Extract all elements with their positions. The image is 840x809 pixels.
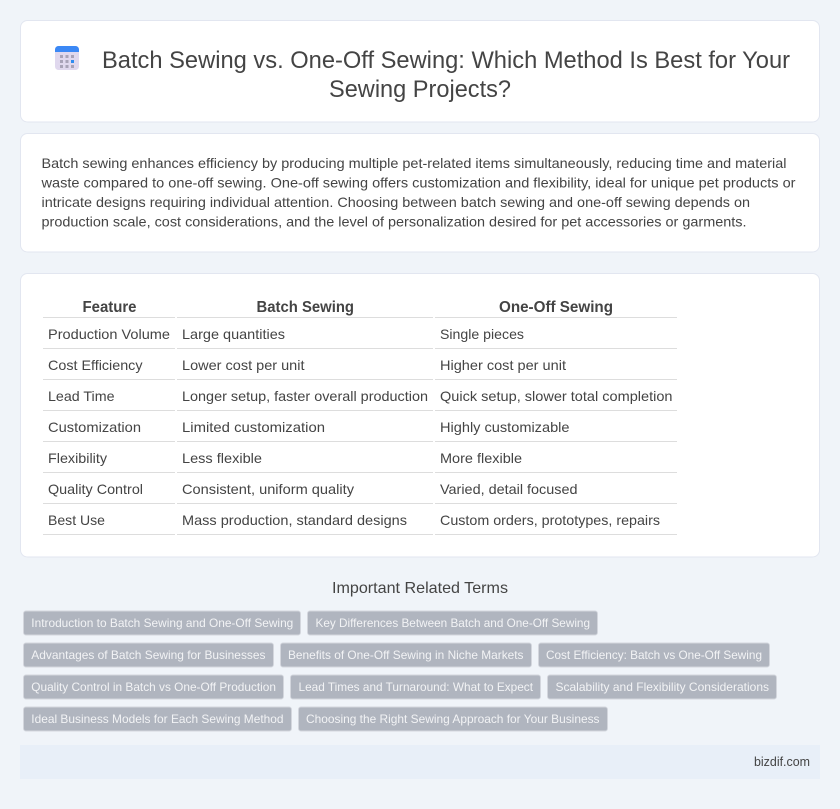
text block: description: waste compared to one-off sewing. One-off sewing offers customization and flexibility, ideal for unique pet products or bbox=[40, 175, 796, 191]
row: customization: Highly customizable bbox=[440, 419, 570, 435]
text block: description bbox=[40, 155, 796, 230]
table header row: One-Off Sewing bbox=[499, 299, 613, 316]
tag bbox=[24, 643, 274, 667]
tag bbox=[280, 643, 532, 667]
related terms tags bbox=[24, 611, 776, 731]
row: customization: Customization bbox=[48, 419, 141, 435]
row: best use: Custom orders, prototypes, repairs bbox=[440, 512, 660, 528]
tag: Scalability and Flexibility Considerations bbox=[556, 680, 769, 694]
tag: Benefits of One-Off Sewing in Niche Markets bbox=[288, 648, 524, 662]
tag: Introduction to Batch Sewing and One-Off Sewing bbox=[31, 616, 293, 630]
tag: Lead Times and Turnaround: What to Expect bbox=[298, 680, 534, 694]
panel: header bbox=[20, 20, 820, 122]
row: lead time: Quick setup, slower total completion bbox=[440, 388, 672, 404]
table rules bbox=[43, 317, 677, 535]
row: quality control: Quality Control bbox=[48, 481, 143, 497]
tag bbox=[24, 675, 284, 699]
row: quality control: Consistent, uniform quality bbox=[182, 481, 354, 497]
row: flexibility: Less flexible bbox=[182, 450, 262, 466]
panel: comparison table bbox=[20, 274, 820, 557]
tag bbox=[24, 611, 300, 635]
panel: description bbox=[20, 134, 820, 252]
footer site name: bizdif.com bbox=[754, 755, 810, 769]
row: quality control: Varied, detail focused bbox=[440, 481, 578, 497]
row: cost efficiency bbox=[48, 357, 566, 373]
row: cost efficiency: Higher cost per unit bbox=[440, 357, 566, 373]
row: production volume: Single pieces bbox=[440, 326, 524, 342]
text block: description: production scale, cost considerations, and the level of personalization desired for pet accessories or garments. bbox=[42, 214, 746, 230]
row: production volume: Large quantities bbox=[182, 326, 285, 342]
tag: Cost Efficiency: Batch vs One-Off Sewing bbox=[546, 648, 762, 662]
text block: description: Batch sewing enhances efficiency by producing multiple pet-related items simultaneously, reducing time and material bbox=[42, 155, 786, 171]
row: lead time: Lead Time bbox=[48, 388, 115, 404]
tag bbox=[298, 707, 608, 731]
table header row: Batch Sewing bbox=[256, 299, 354, 316]
row: best use: Best Use bbox=[48, 512, 105, 528]
row: flexibility: Flexibility bbox=[48, 450, 107, 466]
row: flexibility bbox=[48, 450, 522, 466]
row: customization: Limited customization bbox=[182, 419, 325, 435]
title: Batch Sewing vs. One-Off Sewing: Which Method Is Best for Your bbox=[102, 47, 790, 74]
tag bbox=[538, 643, 770, 667]
row: production volume: Production Volume bbox=[48, 326, 170, 342]
title: Sewing Projects? bbox=[329, 76, 511, 103]
text block: description: intricate designs requiring individual attention. Choosing between batch sewing and one-off sewing depends on bbox=[42, 194, 750, 210]
tag: Advantages of Batch Sewing for Businesses bbox=[31, 648, 265, 662]
icon: calendar bbox=[55, 46, 79, 70]
tag bbox=[308, 611, 598, 635]
table header row: Feature bbox=[82, 299, 137, 316]
table header row bbox=[82, 299, 613, 316]
row: lead time bbox=[48, 388, 672, 404]
tag bbox=[548, 675, 776, 699]
tag bbox=[290, 675, 540, 699]
row: best use bbox=[48, 512, 660, 528]
row: best use: Mass production, standard designs bbox=[182, 512, 407, 528]
row: cost efficiency: Cost Efficiency bbox=[48, 357, 142, 373]
footer bbox=[20, 745, 820, 779]
tag: Ideal Business Models for Each Sewing Method bbox=[31, 712, 283, 726]
row: customization bbox=[48, 419, 570, 435]
row: lead time: Longer setup, faster overall production bbox=[182, 388, 428, 404]
row: production volume bbox=[48, 326, 524, 342]
row: quality control bbox=[48, 481, 578, 497]
tag bbox=[24, 707, 292, 731]
tag: Choosing the Right Sewing Approach for Your Business bbox=[306, 712, 600, 726]
row: cost efficiency: Lower cost per unit bbox=[182, 357, 305, 373]
tag: Quality Control in Batch vs One-Off Production bbox=[31, 680, 276, 694]
row: flexibility: More flexible bbox=[440, 450, 522, 466]
title bbox=[102, 47, 790, 103]
tag: Key Differences Between Batch and One-Off Sewing bbox=[316, 616, 590, 630]
heading: important related terms: Important Related Terms bbox=[332, 580, 508, 597]
